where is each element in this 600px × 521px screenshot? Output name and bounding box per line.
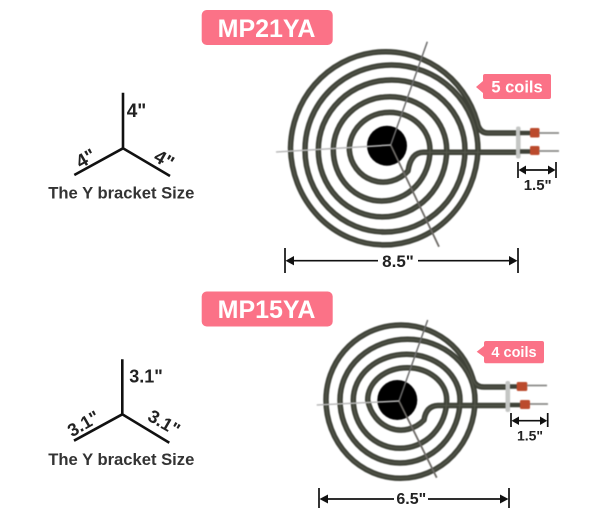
title: MP15YA bbox=[202, 292, 333, 326]
dimension: 1.5 inch terminal spacing: 1.5" bbox=[524, 177, 552, 194]
icon: 4-coil heating element bbox=[317, 320, 548, 478]
diagram: Y bracket size 4 inch: 4" bbox=[150, 146, 177, 174]
diagram: Y bracket size 3.1 inch: 3.1" bbox=[64, 407, 103, 441]
icon: 5-coil heating element bbox=[276, 42, 559, 247]
diagram: Y bracket size 3.1 inch: 3.1" bbox=[144, 406, 184, 440]
dimension: 8.5 inch diameter: 8.5" bbox=[382, 252, 414, 271]
dimension: 1.5 inch terminal spacing: 1.5" bbox=[517, 428, 543, 444]
dimension: 1.5 inch terminal spacing bbox=[518, 162, 556, 194]
title: MP21YA bbox=[202, 10, 333, 45]
title: MP15YA: MP15YA bbox=[218, 296, 315, 324]
title: MP21YA: MP21YA bbox=[218, 15, 315, 43]
callout: 4 coils bbox=[477, 341, 544, 363]
diagram: Y bracket size 4 inch: The Y bracket Size bbox=[48, 184, 194, 202]
diagram: Y bracket size 4 inch bbox=[48, 93, 194, 202]
diagram: Y bracket size 3.1 inch bbox=[48, 359, 194, 469]
dimension: 1.5 inch terminal spacing bbox=[511, 413, 548, 444]
diagram: Y bracket size 3.1 inch: The Y bracket Size bbox=[48, 450, 194, 469]
diagram: Y bracket size 4 inch: 4" bbox=[127, 101, 146, 122]
callout: 5 coils: 5 coils bbox=[491, 78, 543, 96]
callout: 5 coils bbox=[476, 74, 551, 99]
callout: 4 coils: 4 coils bbox=[491, 345, 537, 361]
dimension: 6.5 inch diameter: 6.5" bbox=[396, 491, 426, 508]
panel: MP15YA model bbox=[48, 292, 548, 508]
diagram: Y bracket size 4 inch: 4" bbox=[73, 145, 100, 173]
diagram: Y bracket size 3.1 inch: 3.1" bbox=[129, 367, 163, 387]
dimension: 8.5 inch diameter bbox=[285, 248, 518, 273]
dimension: 6.5 inch diameter bbox=[319, 488, 509, 508]
panel: MP21YA model bbox=[48, 10, 559, 273]
